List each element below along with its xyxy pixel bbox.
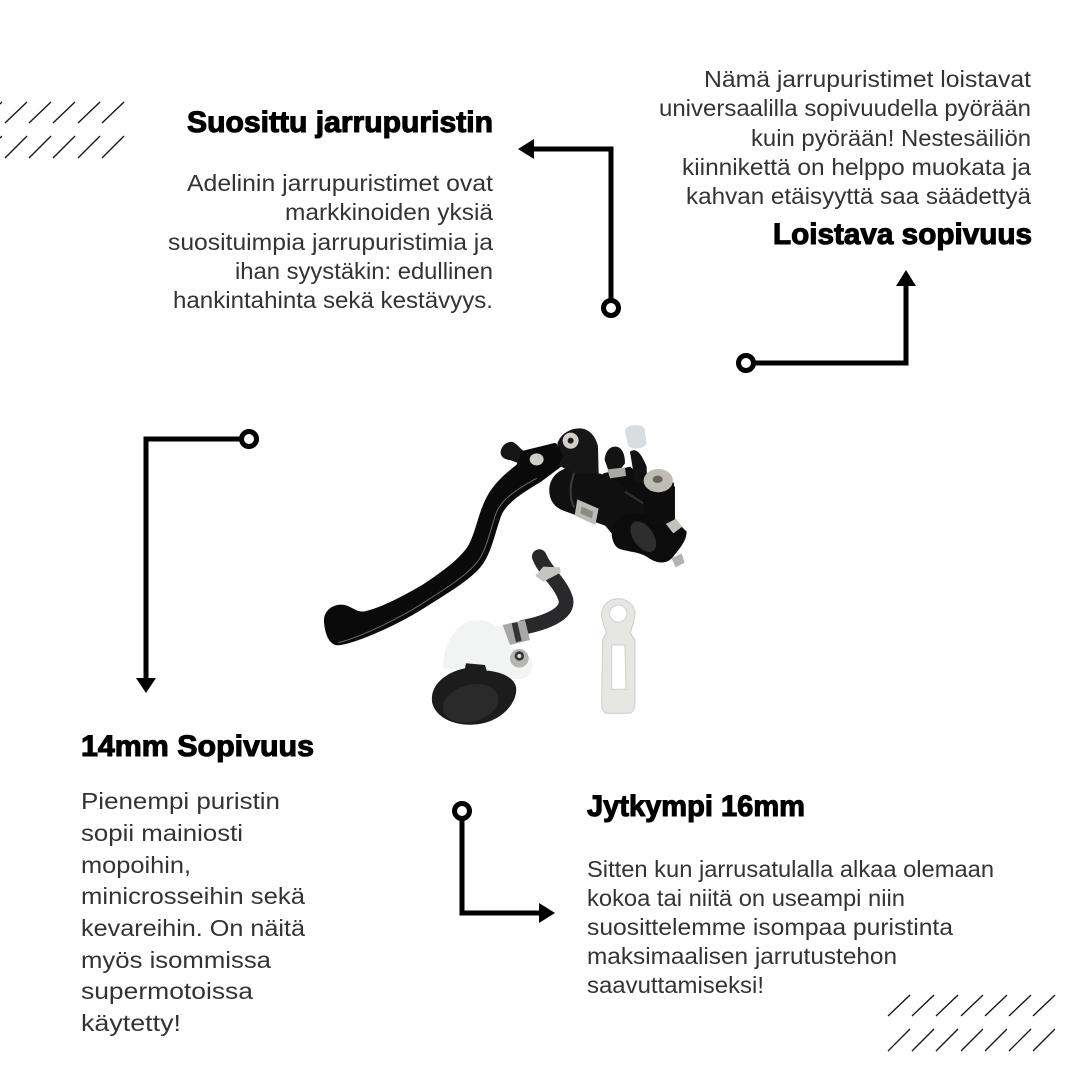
- text block: 14mm Sopivuus: supermotoissa: [81, 978, 254, 1004]
- text block: Suosittu jarrupuristin: markkinoiden yksiä: [285, 199, 494, 225]
- text block: 14mm Sopivuus: käytetty!: [81, 1010, 181, 1036]
- heading: Suosittu jarrupuristin: Suosittu jarrupuristin: [187, 106, 493, 139]
- arrow: to 14mm Sopivuus: [136, 432, 256, 693]
- housing filler: [597, 467, 675, 543]
- text block: 14mm Sopivuus: Pienempi puristin: [81, 788, 280, 814]
- lever adjuster knob: [501, 442, 527, 465]
- mounting bracket: [602, 599, 635, 713]
- text block: Loistava sopivuus: kuin pyörään! Nestesäiliön: [751, 125, 1031, 151]
- text block: Suosittu jarrupuristin: [168, 170, 494, 313]
- text block: 14mm Sopivuus: sopii mainiosti: [81, 820, 243, 846]
- reservoir bolt: [510, 649, 529, 668]
- text block: 14mm Sopivuus: minicrosseihin sekä: [81, 883, 306, 909]
- text block: Loistava sopivuus: kahvan etäisyyttä saa säädettyä: [686, 183, 1032, 209]
- text block: Jytkympi 16mm: maksimaalisen jarrutustehon: [587, 943, 897, 969]
- text block: Jytkympi 16mm: kokoa tai niitä on useampi niin: [587, 885, 905, 911]
- reservoir port tube: [630, 450, 647, 485]
- data label: [575, 499, 599, 525]
- nipple port: [605, 447, 625, 470]
- decorative hatch: bottom right: [888, 995, 1055, 1051]
- clamp bolts: [666, 519, 682, 533]
- pivot block: [557, 428, 599, 473]
- text block: Jytkympi 16mm: suosittelemme isompaa puristinta: [587, 914, 954, 940]
- text block: Loistava sopivuus: [659, 66, 1032, 209]
- arrow: to Loistava sopivuus: [738, 270, 916, 370]
- text block: Loistava sopivuus: Nämä jarrupuristimet loistavat: [704, 66, 1031, 92]
- text block: 14mm Sopivuus: kevareihin. On näitä: [81, 915, 306, 941]
- arrow: to Suosittu jarrupuristin: [518, 139, 618, 316]
- text block: Suosittu jarrupuristin: Adelinin jarrupuristimet ovat: [187, 170, 493, 196]
- text block: Jytkympi 16mm: saavuttamiseksi!: [587, 972, 764, 998]
- lever blade: [326, 445, 567, 643]
- clamp tower: [644, 482, 675, 525]
- text block: Suosittu jarrupuristin: ihan syystäkin: edullinen: [235, 258, 493, 284]
- clamp: [612, 513, 687, 563]
- reservoir: [443, 620, 533, 679]
- decorative hatch: top left: [0, 102, 124, 158]
- cylinder body: [549, 467, 647, 538]
- text block: 14mm Sopivuus: myös isommissa: [81, 947, 272, 973]
- text block: Suosittu jarrupuristin: hankintahinta sekä kestävyys.: [173, 287, 493, 313]
- heading: Loistava sopivuus: Loistava sopivuus: [773, 218, 1032, 251]
- text block: Suosittu jarrupuristin: suosituimpia jarrupuristimia ja: [168, 229, 494, 255]
- heading: Jytkympi 16mm: Jytkympi 16mm: [587, 790, 805, 823]
- text block: Jytkympi 16mm: Sitten kun jarrusatulalla alkaa olemaan: [587, 856, 994, 882]
- hose: [523, 557, 566, 627]
- arrow: to Jytkympi 16mm: [454, 804, 555, 923]
- text block: 14mm Sopivuus: mopoihin,: [81, 852, 191, 878]
- text block: Loistava sopivuus: kiinnikettä on helppo muokata ja: [682, 154, 1032, 180]
- reservoir cap: [432, 663, 516, 725]
- hose band: [503, 620, 530, 645]
- lever pin: [530, 453, 544, 465]
- text block: Loistava sopivuus: universaalilla sopivuudella pyörään: [659, 95, 1031, 121]
- gray rubber cap: [625, 425, 647, 449]
- product illustration: brake master cylinder: [326, 425, 687, 728]
- text block: Jytkympi 16mm: [587, 856, 994, 998]
- heading: 14mm Sopivuus: 14mm Sopivuus: [81, 730, 314, 763]
- text block: 14mm Sopivuus: [81, 788, 306, 1036]
